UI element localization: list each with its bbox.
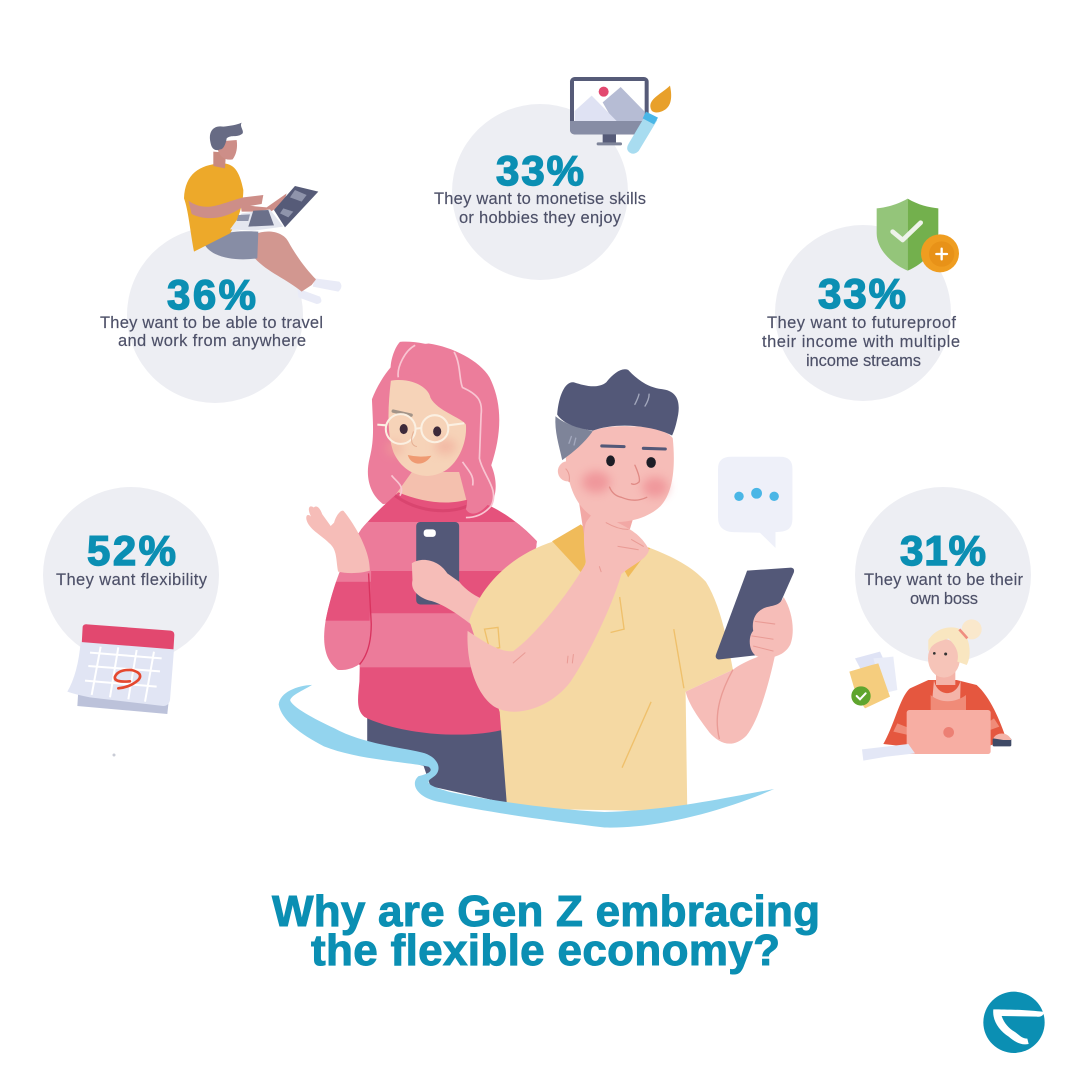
label: futureproof income: their income with multiple bbox=[762, 333, 960, 351]
label: travel and work bbox=[100, 314, 323, 350]
phone bbox=[416, 522, 459, 604]
panel: futureproof income 33% bbox=[762, 199, 960, 401]
label: monetise skills: They want to monetise skills bbox=[434, 190, 646, 208]
label: monetise skills bbox=[434, 190, 646, 227]
man bbox=[467, 369, 794, 812]
stat: 31%: 31% bbox=[900, 527, 986, 574]
panel: own boss 31% bbox=[849, 487, 1031, 761]
panel: monetise skills 33% bbox=[434, 77, 671, 280]
stat: 33%: 33% bbox=[818, 270, 906, 317]
label: flexibility: They want flexibility bbox=[56, 571, 208, 589]
label: travel and work: They want to be able to travel bbox=[100, 314, 323, 332]
woman bbox=[306, 342, 550, 803]
icon: monitor and brush bbox=[570, 77, 671, 154]
woman's raised hand bbox=[306, 506, 370, 573]
tablet bbox=[716, 568, 794, 660]
blue brush swoosh bbox=[279, 685, 774, 828]
icon: calendar bbox=[67, 624, 174, 714]
icon: woman at laptop with folder bbox=[849, 619, 1011, 761]
illustration: two people with phones bbox=[279, 342, 794, 828]
small speck bbox=[112, 754, 116, 756]
man's head bbox=[566, 426, 674, 522]
stat: 33%: 33% bbox=[496, 147, 584, 194]
label: monetise skills: or hobbies they enjoy bbox=[459, 209, 622, 227]
man's arm and hand at chin bbox=[467, 501, 649, 712]
woman's phone hand bbox=[412, 560, 486, 631]
man's right arm bbox=[686, 654, 775, 744]
panel: flexibility 52% bbox=[43, 487, 219, 714]
title: the flexible economy? bbox=[311, 926, 780, 975]
man's hand on tablet bbox=[750, 597, 793, 658]
title bbox=[272, 887, 820, 975]
label: own boss: own boss bbox=[910, 590, 978, 608]
icon: man with laptop bbox=[184, 123, 341, 304]
icon: shield and coin bbox=[877, 199, 959, 272]
title: Why are Gen Z embracing bbox=[272, 887, 820, 936]
panel: travel 36% bbox=[100, 123, 341, 403]
logo bbox=[983, 992, 1045, 1053]
speech bubble bbox=[718, 457, 792, 548]
label: futureproof income: They want to futureproof bbox=[767, 314, 956, 332]
label: travel and work: and work from anywhere bbox=[118, 332, 306, 350]
label: futureproof income: income streams bbox=[806, 352, 921, 370]
label: futureproof income bbox=[762, 314, 960, 370]
stat: 52%: 52% bbox=[87, 527, 176, 574]
label: own boss: They want to be their bbox=[864, 571, 1024, 589]
stat: 36%: 36% bbox=[167, 271, 256, 318]
label: own boss bbox=[864, 571, 1024, 608]
